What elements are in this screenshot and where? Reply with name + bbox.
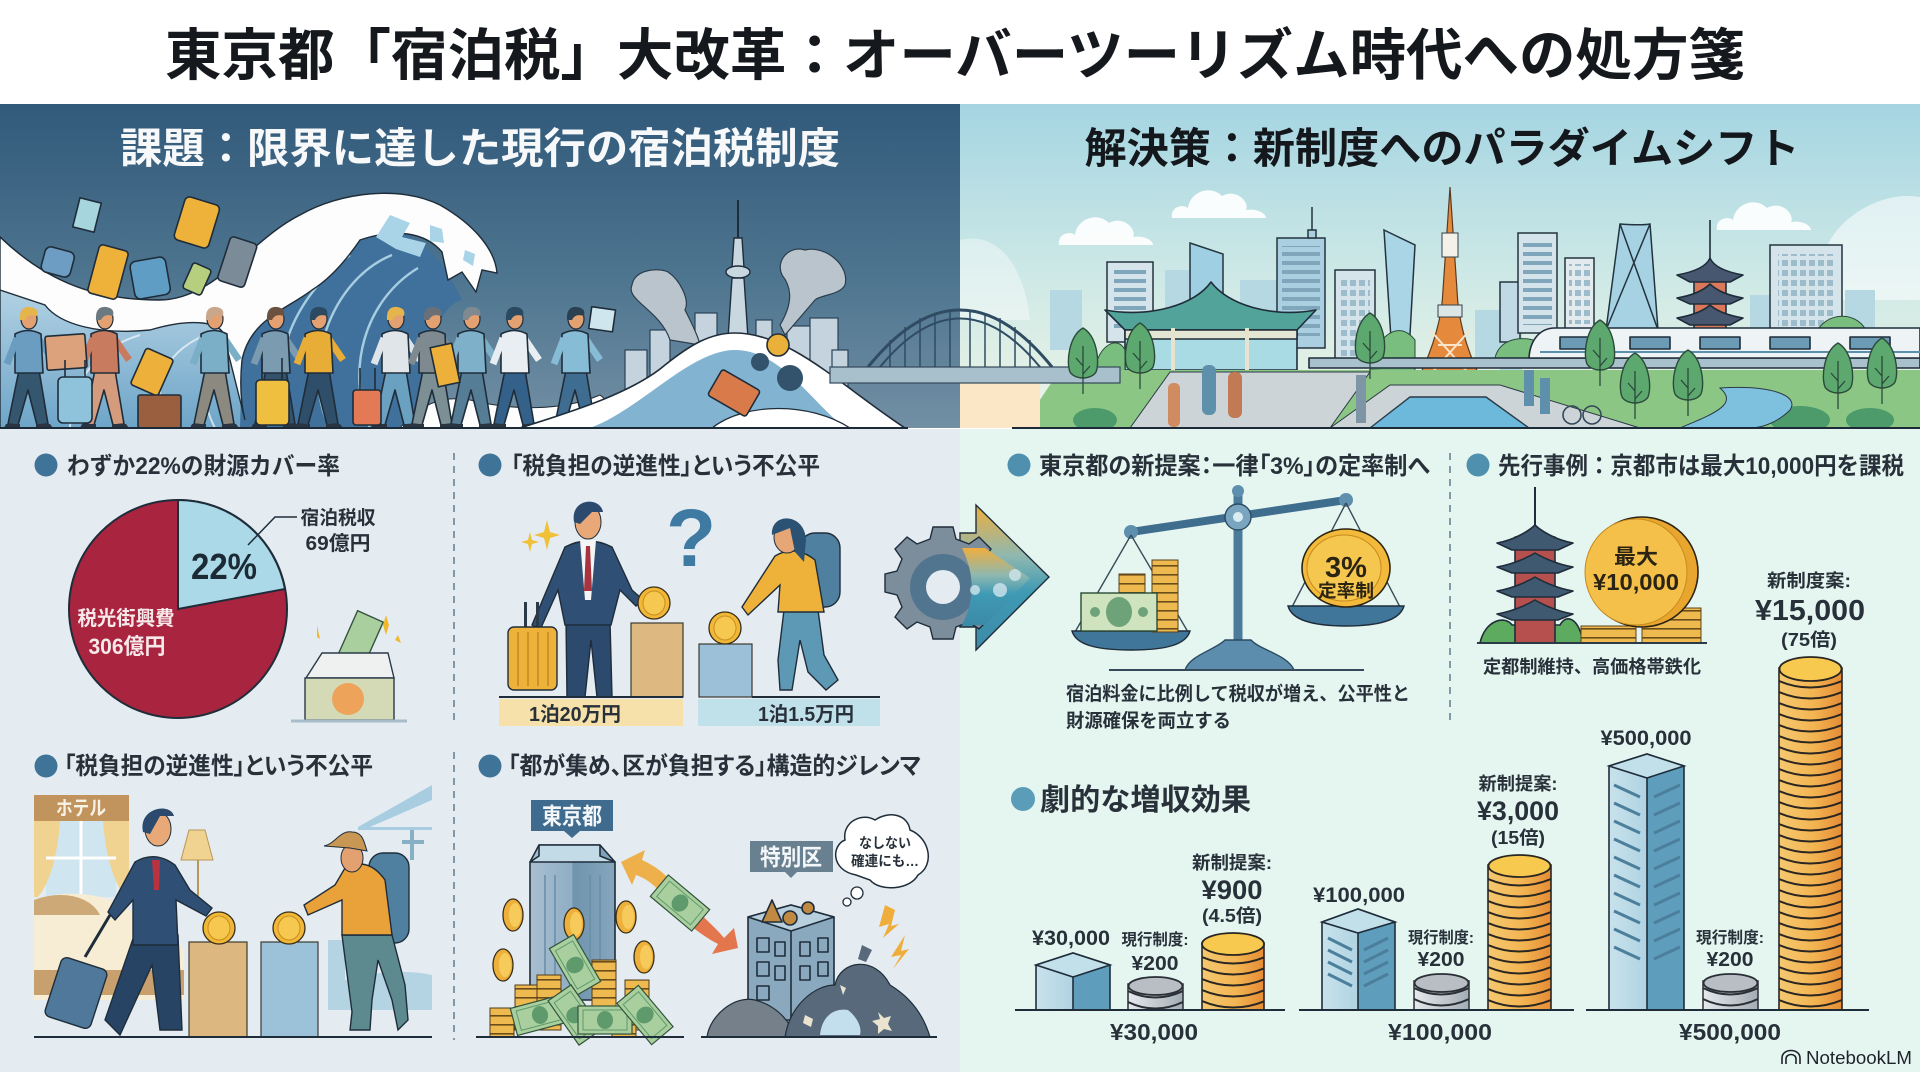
heading: 東京都の新提案：一律「3%」の定率制へ (1039, 453, 1431, 480)
people in park (1168, 365, 1601, 427)
heading: 「都が集め、区が負担する」構造的ジレンマ (508, 752, 921, 780)
group: 30000 yen: (4.5倍) (1202, 906, 1262, 926)
trees (1068, 313, 1897, 434)
group: 30000 yen: 現行制度: (1122, 930, 1188, 949)
group: 500000 yen: ¥500,000 (1679, 1019, 1781, 1045)
heading: 「税負担の逆進性」という不公平 (511, 453, 820, 480)
panel: lower right background (960, 429, 1920, 1072)
label: 15k per night (698, 697, 880, 726)
group: 500000 yen: 現行制度: (1696, 928, 1764, 947)
label: tokyo metropolitan (531, 800, 613, 838)
elevated rail and train (1309, 328, 1920, 368)
clouds (960, 190, 1920, 320)
tourists with luggage (4, 307, 616, 428)
icon: money pile (476, 935, 684, 1045)
group: 100000 yen: 現行制度: (1408, 928, 1474, 947)
pond and river (1370, 387, 1792, 428)
icon: ward building (748, 900, 834, 1020)
ground (1021, 370, 1920, 428)
icon: blue tax box (261, 912, 318, 1037)
text block: proposal description: 宿泊料金に比例して税収が増え、公平性と (1066, 682, 1410, 705)
group: 100000 yen: 新制提案: (1478, 773, 1558, 794)
callout: lodging tax revenue: 69億円 (306, 532, 370, 555)
bridge arch and deck (830, 310, 1120, 428)
heading: 「税負担の逆進性」という不公平 (64, 753, 373, 780)
wave foam crest (0, 193, 497, 420)
icon: blue box and coin (699, 612, 752, 697)
group: 500000 yen: ¥500,000 (1600, 727, 1692, 750)
city skyline behind the wave (625, 313, 848, 410)
title: 東京都「宿泊税」大改革：オーバーツーリズム時代への処方箋 (165, 24, 1745, 87)
hotel room scene (34, 795, 213, 1000)
pale background buildings (1050, 270, 1875, 370)
panel: solution header illustration (830, 104, 1920, 434)
icon: 3 percent coin (1302, 529, 1390, 607)
icon: traveller with hat (304, 832, 409, 1030)
group: 30000 yen (1015, 852, 1285, 1045)
section: regressive burden top (478, 453, 880, 726)
icon: max 10000 yen coin: 最大 (1614, 546, 1658, 569)
group: 500000 yen (1586, 571, 1869, 1045)
group: 100000 yen: ¥100,000 (1388, 1019, 1492, 1045)
group: 100000 yen: ¥3,000 (1477, 796, 1559, 826)
icon: tax box with bill (291, 611, 407, 721)
label: special wards: 特別区 (760, 844, 822, 870)
icon: max 10000 yen coin (1477, 517, 1707, 643)
icon: max 10000 yen coin: ¥10,000 (1593, 569, 1679, 595)
group: 500000 yen: ¥200 (1706, 949, 1754, 971)
pie chart: 22% (191, 546, 257, 587)
group: 100000 yen: (15倍) (1491, 828, 1545, 848)
pale lobby background (328, 785, 432, 1010)
panel: issue header illustration (0, 104, 960, 428)
icon: tan box and coin (631, 587, 683, 697)
text: kyoto caption: 定都制維持、高価格帯鉄化 (1483, 657, 1701, 677)
big wave body (0, 215, 320, 428)
label: special wards (750, 841, 833, 878)
icon: garbage pile (701, 905, 937, 1037)
group: 30000 yen: ¥30,000 (1110, 1019, 1198, 1045)
callout: thought bubble (836, 815, 928, 906)
callout: thought bubble: 確連にも… (851, 853, 919, 869)
icon: smoke clouds (631, 249, 846, 345)
flying luggage (40, 196, 258, 300)
icon: question mark: ? (666, 493, 716, 584)
hotel room scene: ホテル (56, 798, 106, 820)
label: 15k per night: 1泊1.5万円 (758, 703, 854, 726)
callout: lodging tax revenue (248, 507, 376, 555)
icon: tokyo tower (1419, 187, 1480, 377)
logo: NotebookLM: NotebookLM (1806, 1048, 1912, 1068)
pie chart: 306億円 (88, 634, 166, 659)
group: 100000 yen (1299, 773, 1574, 1045)
group: 100000 yen: ¥200 (1418, 949, 1464, 971)
icon: 3 percent coin: 3% (1325, 552, 1367, 584)
section: kyoto precedent (1466, 453, 1904, 677)
heading: issue: 課題：限界に達した現行の宿泊税制度 (120, 125, 840, 172)
group: 500000 yen: ¥15,000 (1755, 595, 1865, 627)
icon: falling coins (493, 899, 654, 981)
panel: lower left background (0, 429, 960, 1072)
arrow: money flows between metro and wards (621, 850, 738, 954)
icon: pagoda (1677, 220, 1743, 330)
label: tokyo metropolitan: 東京都 (542, 803, 602, 829)
skyline towers (1107, 207, 1842, 370)
label: 200k per night: 1泊20万円 (529, 703, 621, 726)
callout: lodging tax revenue: 宿泊税収 (300, 507, 376, 529)
section: regressive burden bottom (34, 753, 432, 1037)
bushes behind rail (1095, 316, 1868, 372)
icon: green temple (1105, 282, 1316, 370)
pie chart: 税光街興費 (78, 607, 174, 630)
section: revenue coverage (34, 453, 407, 721)
group: 30000 yen: ¥30,000 (1032, 927, 1110, 950)
wave inner wall (240, 232, 462, 428)
heading: 劇的な増収効果 (1040, 784, 1251, 817)
small wave with debris (520, 333, 905, 428)
heading: 先行事例：京都市は最大10,000円を課税 (1498, 453, 1904, 480)
group: 30000 yen: ¥900 (1202, 875, 1262, 905)
group: 100000 yen: ¥100,000 (1313, 884, 1405, 907)
section: flat rate proposal (1008, 453, 1431, 732)
icon: balance scale (1072, 485, 1404, 670)
icon: skytree (726, 200, 750, 338)
label: 200k per night (499, 697, 683, 726)
icon: backpacker (742, 518, 840, 690)
section: structural dilemma (476, 752, 937, 1045)
text block: proposal description (1066, 682, 1410, 732)
group: 30000 yen: ¥200 (1132, 953, 1178, 975)
callout: thought bubble: なしない (859, 835, 911, 851)
icon: 3 percent coin: 定率制 (1318, 581, 1374, 601)
chart: dramatic revenue increase (1011, 571, 1869, 1045)
text block: proposal description: 財源確保を両立する (1066, 710, 1231, 732)
group: 500000 yen: (75倍) (1781, 630, 1837, 650)
pie chart (69, 500, 287, 718)
icon: businessman walking with suitcase (44, 809, 212, 1035)
icon: tan tax box (189, 912, 247, 1037)
heading: わずか22%の財源カバー率 (67, 453, 340, 480)
icon: kyoto pagoda (1480, 487, 1583, 643)
heading: solution: 解決策：新制度へのパラダイムシフト (1084, 125, 1800, 172)
group: 500000 yen: 新制度案: (1767, 571, 1851, 591)
icon: businessman with suitcase (508, 502, 643, 697)
icon: metro tower (530, 845, 615, 1000)
arrow: gear to arrow transition (885, 505, 1049, 650)
group: 30000 yen: 新制提案: (1192, 852, 1272, 873)
